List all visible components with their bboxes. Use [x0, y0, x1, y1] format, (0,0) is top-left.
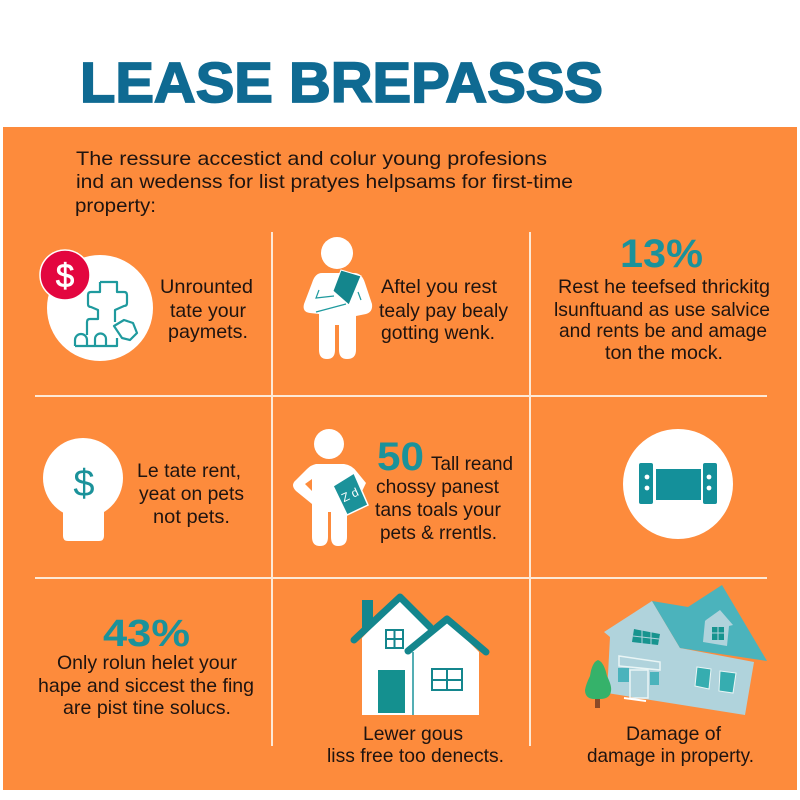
panel: cell 3 statistic 13% — [554, 232, 770, 364]
text: cell 9: damage in property. — [587, 745, 754, 767]
text: cell 2: tealy pay bealy — [379, 300, 508, 322]
icon: person holding card: Z d — [339, 485, 361, 505]
text: cell 8: Lewer gous — [363, 723, 463, 745]
icon: dollar bulb — [43, 438, 123, 541]
panel: cell 1 payments — [40, 250, 253, 361]
text: cell 4: yeat on pets — [139, 483, 244, 505]
panel: cell 2 person with book — [304, 237, 508, 359]
panel: cell 8 white house — [327, 597, 504, 767]
stat: 50: 50 — [377, 435, 424, 479]
text: cell 5: Tall reand — [431, 453, 513, 475]
text: cell 7: Only rolun helet your — [57, 652, 237, 674]
text: cell 7: are pist tine solucs. — [63, 697, 231, 719]
text: cell 5: tans toals your — [375, 499, 501, 521]
text: cell 3 — [554, 276, 770, 364]
stat: 13%: 13% — [620, 232, 703, 276]
text: cell 8 — [327, 723, 504, 767]
intro text: ind an wedenss for list pratyes helpsams for first-time — [76, 171, 573, 193]
text: cell 4: Le tate rent, — [137, 460, 241, 482]
text: cell 2: gotting wenk. — [381, 322, 495, 344]
text: cell 3: and rents be and amage — [559, 320, 767, 342]
icon: dollar bulb: $ — [73, 463, 95, 505]
text: cell 2 — [379, 276, 508, 344]
text: cell 9 — [587, 723, 754, 767]
panel: cell 6 device icon — [623, 429, 733, 539]
icon: blue house with tree — [585, 585, 767, 715]
text: cell 4 — [137, 460, 244, 528]
text: cell 1 — [160, 276, 253, 343]
title: LEASE BREPASSS — [80, 52, 603, 114]
text: cell 3: ton the mock. — [605, 342, 723, 364]
panel: cell 5 person with card — [293, 429, 513, 546]
text: cell 2: Aftel you rest — [381, 276, 498, 298]
intro text: property: — [75, 195, 156, 217]
text: cell 3: lsunftuand as use salvice — [554, 299, 770, 321]
text: cell 7 — [38, 652, 254, 719]
panel: cell 4 rent — [43, 438, 244, 541]
text: cell 1: paymets. — [168, 321, 248, 343]
intro text — [75, 148, 573, 217]
text: cell 7: hape and siccest the fing — [38, 675, 254, 697]
text: cell 3: Rest he teefsed thrickitg — [558, 276, 770, 298]
icon: person holding card — [293, 429, 368, 546]
icon: device in circle — [623, 429, 733, 539]
intro text: The ressure accestict and colur young profesions — [76, 148, 547, 170]
panel: cell 7 statistic 43% — [38, 613, 254, 719]
text: cell 4: not pets. — [153, 506, 230, 528]
text: cell 5: pets & rrentls. — [380, 522, 497, 544]
icon: puzzle castle with dollar badge: $ — [56, 257, 74, 294]
text: cell 1: Unrounted — [160, 276, 253, 298]
stat: 43%: 43% — [103, 613, 190, 655]
icon: person holding book — [304, 237, 372, 359]
icon: puzzle castle with dollar badge — [40, 250, 153, 361]
panel: cell 9 blue house — [585, 585, 767, 767]
text: cell 5 — [375, 453, 513, 544]
text: cell 8: liss free too denects. — [327, 745, 504, 767]
text: cell 5: chossy panest — [376, 476, 500, 498]
text: cell 1: tate your — [170, 300, 246, 322]
icon: white house — [354, 597, 486, 715]
text: cell 9: Damage of — [626, 723, 722, 745]
